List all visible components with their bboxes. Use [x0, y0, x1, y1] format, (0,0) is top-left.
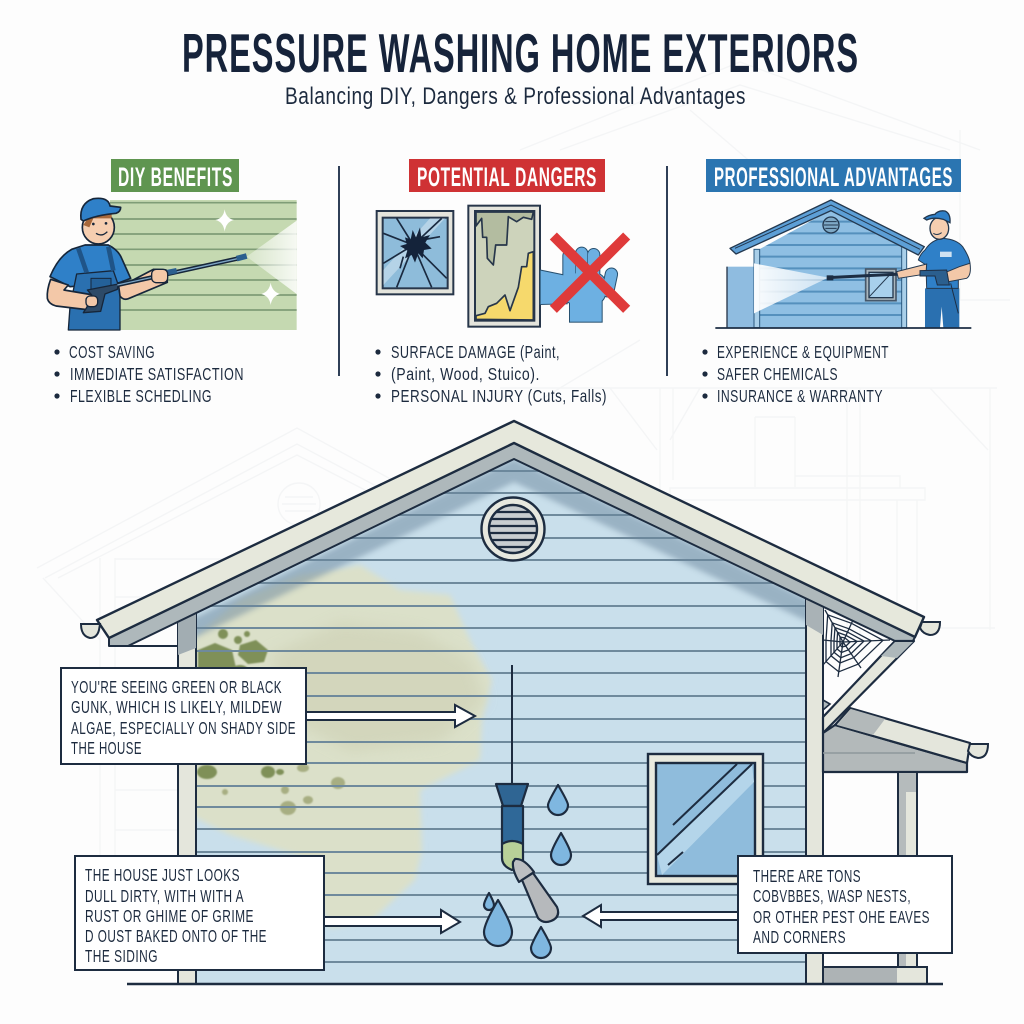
- illustration: worker washing green siding: [47, 198, 297, 330]
- callout: dull dirty house: D OUST BAKED ONTO OF THE: [85, 926, 267, 946]
- callout: green or black gunk: GUNK, WHICH IS LIKELY, MILDEW: [71, 697, 282, 717]
- list: professional advantages: INSURANCE & WARRANTY: [717, 386, 883, 406]
- list: potential dangers: PERSONAL INJURY (Cuts, Falls): [391, 386, 607, 406]
- heading: potential dangers: [409, 159, 605, 192]
- icon: damaged wall surface: [468, 206, 540, 327]
- callout: green or black gunk: THE HOUSE: [71, 738, 142, 758]
- main roof: [97, 421, 924, 646]
- list: DIY benefits: [54, 342, 244, 406]
- gutter: right: [920, 622, 940, 635]
- ground line: [127, 983, 943, 985]
- list: DIY benefits: COST SAVING: [69, 342, 155, 362]
- callout: dull dirty house: DULL DIRTY, WITH WITH A: [85, 886, 244, 906]
- callout: cobwebs and pests: [738, 856, 952, 953]
- list: potential dangers: (Paint, Wood, Stuico).: [391, 364, 540, 384]
- callout: cobwebs and pests: OR OTHER PEST OHE EAVES: [753, 907, 930, 927]
- illustration: professional washing blue house: [715, 200, 971, 328]
- icon: injured hand with red cross: [541, 236, 627, 322]
- diagonal brace: [823, 641, 914, 733]
- right column: [806, 598, 823, 984]
- arrow: to mildew: [304, 705, 475, 727]
- list: potential dangers: SURFACE DAMAGE (Paint,: [391, 342, 560, 362]
- icon: attic vent: [482, 498, 544, 560]
- arrow: to nozzle from pests callout: [583, 905, 740, 927]
- callout: cobwebs and pests: AND CORNERS: [753, 927, 846, 947]
- list: professional advantages: SAFER CHEMICALS: [717, 364, 838, 384]
- callout: dull dirty house: RUST OR GHIME OF GRIME: [85, 906, 254, 926]
- callout: green or black gunk: YOU'RE SEEING GREEN OR BLACK: [71, 677, 282, 697]
- panel: professional advantages: [702, 159, 971, 406]
- window: [648, 754, 763, 884]
- icon: cobweb in eave corner: [823, 610, 890, 677]
- list: DIY benefits: FLEXIBLE SCHEDLING: [70, 386, 212, 406]
- stain: mildew and algae: [190, 565, 492, 928]
- list: professional advantages: EXPERIENCE & EQUIPMENT: [717, 342, 889, 362]
- porch roof: [823, 708, 970, 772]
- callout: dull dirty house: THE HOUSE JUST LOOKS: [85, 865, 240, 885]
- subtitle: Balancing DIY, Dangers & Professional Advantages: [285, 83, 746, 110]
- gutter: left: [81, 624, 100, 638]
- callout: dull dirty house: THE SIDING: [85, 946, 158, 966]
- gutter: porch: [968, 744, 988, 758]
- callout: green or black gunk: ALGAE, ESPECIALLY ON SHADY SIDE: [71, 718, 296, 738]
- panel: potential dangers: [375, 159, 627, 406]
- list: potential dangers: [375, 342, 607, 406]
- panel: DIY benefits: [47, 159, 297, 406]
- left column: [178, 612, 196, 984]
- icon: broken window: [377, 211, 453, 294]
- icon: pressure washer nozzle: [496, 665, 558, 922]
- list: DIY benefits: IMMEDIATE SATISFACTION: [70, 364, 244, 384]
- icon: water drops: [484, 785, 571, 958]
- main house illustration: [81, 421, 988, 984]
- heading: DIY benefits: [111, 159, 239, 192]
- callout: dull dirty house: [75, 856, 324, 970]
- arrow: to siding dirt: [322, 910, 460, 933]
- heading: DIY benefits: DIY BENEFITS: [118, 162, 233, 192]
- house wall with siding: [170, 459, 830, 984]
- heading: potential dangers: POTENTIAL DANGERS: [417, 162, 597, 192]
- callout: green or black gunk: [61, 668, 306, 764]
- callout: cobwebs and pests: COBVBBES, WASP NESTS,: [753, 886, 911, 906]
- porch post and base: [823, 772, 927, 984]
- callout: cobwebs and pests: THERE ARE TONS: [753, 866, 861, 886]
- list: professional advantages: [702, 342, 889, 406]
